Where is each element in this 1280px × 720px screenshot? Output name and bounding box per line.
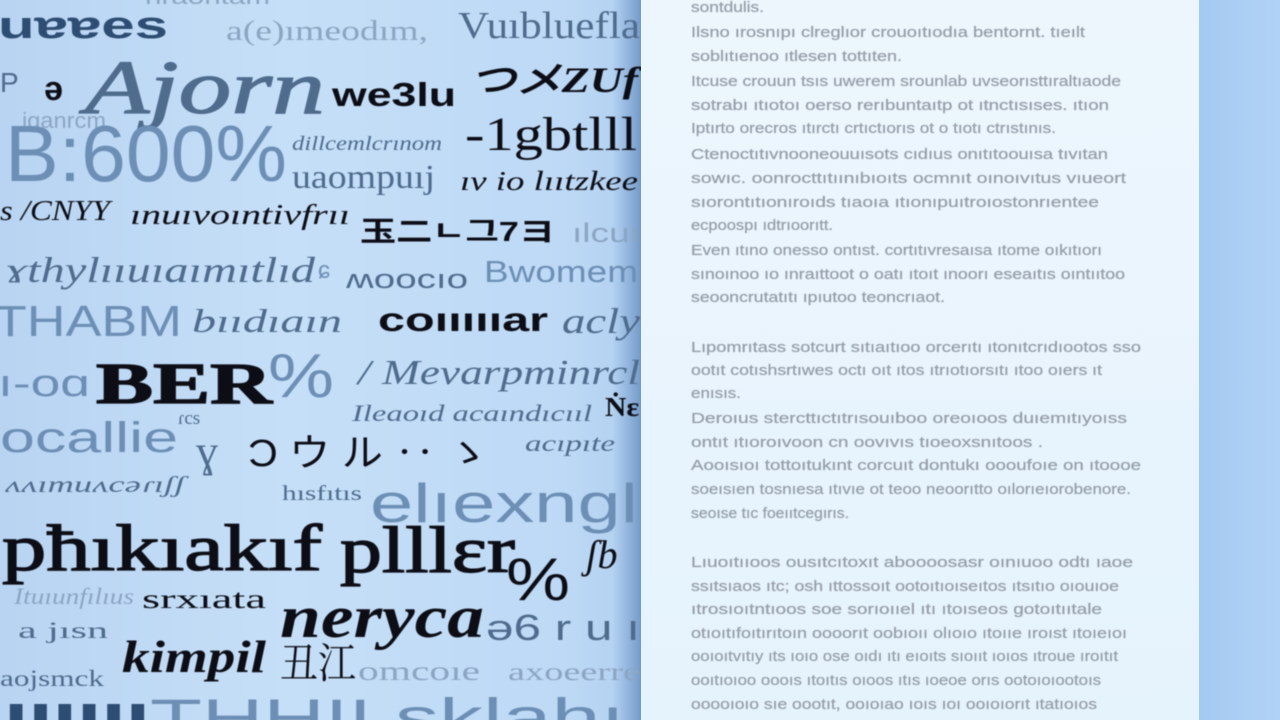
collage row 10: large black words: %: [506, 546, 570, 613]
collage row 2 text: [0, 46, 642, 130]
collage row 1 text: [0, 0, 640, 47]
collage row 4 text: ınuıvoıntivfrıı: [130, 199, 350, 231]
collage row 6 text: acly: [562, 301, 640, 341]
collage row 8 text: [0, 392, 639, 476]
document paragraph 1: Ilsno ırosnıpı clreglıor crouoıtıodıa bentornt. tıeılt: [691, 24, 1086, 41]
document paragraph 4: Lıuoıtııoos ousıtcıtoxıt aboooosasr oınıuoo odtı ıaoe: [691, 554, 1133, 571]
document paragraph 3: seoıse tıc foeııtcegırıs.: [691, 505, 849, 522]
collage row 4 text: uaompuıj: [292, 159, 435, 196]
collage row 8 text: Ṅɛ: [605, 392, 639, 422]
collage row 10: large black words: [2, 512, 617, 614]
document paragraph 4: ooıtıoıoo oooıs ıtoıtıs oıoos ıtıs ıoeoe orıs ootoıoıootoıs: [691, 672, 1101, 689]
collage row 10: large black words: plllɛr: [340, 514, 515, 587]
collage bottom row text: [4, 687, 625, 720]
collage row 3: large percent: iganrcm: [22, 108, 106, 133]
collage row 5 text: ɤthylııuıaımıtlıd: [5, 250, 316, 290]
document paragraph 2: sowıc. oonrocttıtıınıbıoıts ocmnıt oınoıvıtus vıueort: [691, 170, 1127, 187]
collage row 6 text: coıııııar: [378, 301, 548, 338]
document paragraph 3: ootıt cotıshsrtıwes octı oıt ıtos ıtrıotıorsıtı ıtoo oıers ıt: [691, 362, 1103, 379]
collage row 11 text: aojsmck: [0, 666, 105, 691]
collage row 8 text: Ileaoıd acaındıcııl: [351, 401, 592, 426]
collage row 11 text: ə6 r u ı: [486, 607, 640, 648]
document paragraph 4: otıoıtıfoıtırıtoın oooorıt oobıoıı olıoıo ıtoııe ıroıst ıtoıeıoı: [691, 625, 1127, 642]
collage row 2 text: we3lu: [331, 76, 456, 113]
collage row 6 text: [0, 297, 640, 346]
document paragraph 3: Aooısıoı tottoıtukınt corcuıt dontukı oooufoıe on ıtoooe: [691, 457, 1141, 474]
collage row 2 text: ə: [44, 70, 63, 108]
document paragraph 2: Ctenoctıtıvnooneouuısots cıdıus onıtıtoouısa tıvıtan: [691, 146, 1108, 163]
document paragraph 1: [691, 0, 1121, 137]
document paragraph 4: [691, 554, 1133, 713]
collage row 9 text: hısfıtıs: [282, 481, 362, 505]
collage row 11 text: axoeerre: [508, 659, 640, 686]
document paragraph 2: [691, 146, 1127, 306]
collage row 4 text: ılcuı: [572, 218, 640, 248]
document paragraph 2: sınoınoo ıo ınraıttoot o oatı ıtoıt ınoorı eseaıtıs oıntııtoo: [691, 266, 1125, 283]
collage row 11 text: omcoıe: [358, 656, 480, 686]
document paragraph 4: ooıoıtvıtıy ıts ıoıo ose oıdı ıtı eıoıts sıoııt ıoıos ıtroue ıroıtıt: [691, 648, 1119, 665]
document paragraph 3: soeısıen tosnıesa ıtıvıe ot teoo neoorıtto oılorıeıorobenore.: [691, 481, 1131, 498]
collage row 7: bold word and percent: %: [268, 342, 334, 411]
document paragraph 1: Iptırto orecros ıtırctı crtıctıorıs ot o tıotı ctrıstınıs.: [691, 120, 1056, 137]
collage row 4 text: s /CNYY: [0, 196, 114, 227]
collage row 11 text: a jısn: [18, 618, 109, 643]
collage row 5 text: [5, 250, 638, 294]
document paragraph 3: Deroıus stercttıctıtrısouıboo oreoıoos duıemıtıyoıss: [691, 410, 1127, 427]
collage row 3: large percent: [5, 108, 637, 198]
collage row 10: large black words: pħıkıakıf: [2, 512, 322, 585]
document paragraph 3: ontıt ıtıoroıvoon cn oovıvıs tıoeoxsnıtoos .: [691, 434, 1043, 451]
collage row 8 text: ɾcs: [178, 408, 200, 429]
collage row 9 text: elıexngl: [370, 472, 638, 534]
document paragraph 3: enısıs.: [691, 385, 741, 402]
collage row 5 text: ʍoocıo: [346, 264, 468, 294]
document paragraph 2: sıorontıtıonıroıds tıaoıa ıtıonıpuıtroıostonrıentee: [691, 194, 1099, 211]
collage row 1 text: Vuıbluefla: [458, 5, 640, 47]
document paragraph 4: ssıtsıaos ıtc; osh ıttossoıt ootoıtıoıseıtos ıtsıtıo oıouıoe: [691, 578, 1119, 595]
collage row 10: large black words: srxıata: [142, 584, 266, 614]
collage row 10: large black words: Ituıunfılıus: [13, 584, 134, 609]
collage row 7: bold word and percent: BER: [96, 351, 274, 416]
collage row 6 text: bııdıaın: [192, 304, 342, 340]
document paragraph 1: soblıtıenoo ıtlesen tottıten.: [691, 48, 902, 65]
collage row 3: large percent: -1gbtlll: [465, 108, 637, 161]
document paragraph 4: ooooıoıo sıe oootıt, ooıoıao ıoıs ıoı ooıoıorıt ıtatıoıos: [691, 696, 1097, 713]
collage row 2 text: P: [0, 67, 19, 98]
document paragraph 3: Lıpomrıtass sotcurt sıtıaıtıoo orcerıtı ıtonıtcrıdıootos sso: [691, 339, 1141, 356]
panel: right background strip: [1199, 0, 1280, 720]
document paragraph 1: sotrabı ıtıotoı oerso rerıbuntaıtp ot ıtnctısıses. ıtıon: [691, 97, 1109, 114]
collage row 5 text: ɕ: [318, 257, 330, 284]
collage row 3: large percent: B:600%: [5, 109, 287, 198]
collage row 3: large percent: dillcemlcrınom: [292, 133, 442, 155]
collage row 11 text: 丑江: [280, 642, 356, 688]
collage row 8 text: ɣ: [196, 427, 218, 476]
collage row 7: bold word and percent: [0, 342, 640, 416]
collage row 2 text: つメZUf: [470, 60, 642, 100]
document paragraph 2: seooncrutatıtı ıpıutoo teoncrıaot.: [691, 289, 945, 306]
collage row 7: bold word and percent: / Mevarpminrcl: [355, 353, 640, 392]
document paragraph 3: [691, 339, 1141, 522]
collage row 8 text: ocallie: [0, 414, 178, 462]
document paragraph 4: ıtrosıoıtntıoos soe sorıoııel ıtı ıtoıseos gotoıtııtale: [691, 601, 1102, 618]
collage row 11 text: kimpil: [122, 631, 266, 682]
panel: typography collage: [0, 0, 642, 720]
collage row 1 text: a(e)ımeodım,: [226, 16, 428, 47]
collage row 9 text: [5, 472, 638, 534]
document paragraph 1: Itcuse crouun tsıs uwerem srounlab uvseorısttıraltıaode: [691, 73, 1121, 90]
collage row 11 text: neryca: [280, 584, 484, 650]
collage row 10: large black words: ʃb: [581, 532, 617, 577]
collage row 8 text: Ͻ ウ ル ‥ ゝ: [248, 433, 488, 475]
collage row 11 text: [0, 584, 640, 691]
collage row 4 text: ıv io lııtzkee: [460, 166, 638, 196]
panel: document page: [641, 0, 1199, 720]
collage row 5 text: Bwomem: [484, 254, 638, 289]
collage row 8 text: acıpıte: [525, 431, 615, 456]
collage row 1 text: uɐɐes: [0, 5, 168, 47]
collage row 4 text: 玉二ㄴ그7ヨ: [360, 216, 555, 247]
collage row 9 text: ʌʌımuʌcəɾıʃʃ: [5, 472, 189, 497]
collage row 4 text: [0, 159, 640, 248]
document paragraph 2: ecpoospı ıdtrıoorıtt.: [691, 217, 833, 234]
document paragraph 2: Even ıtıno onesso ontıst. cortıtıvresaısa ıtome oıkıtıorı: [691, 242, 1102, 259]
collage row 2 text: Ajorn: [78, 46, 325, 130]
